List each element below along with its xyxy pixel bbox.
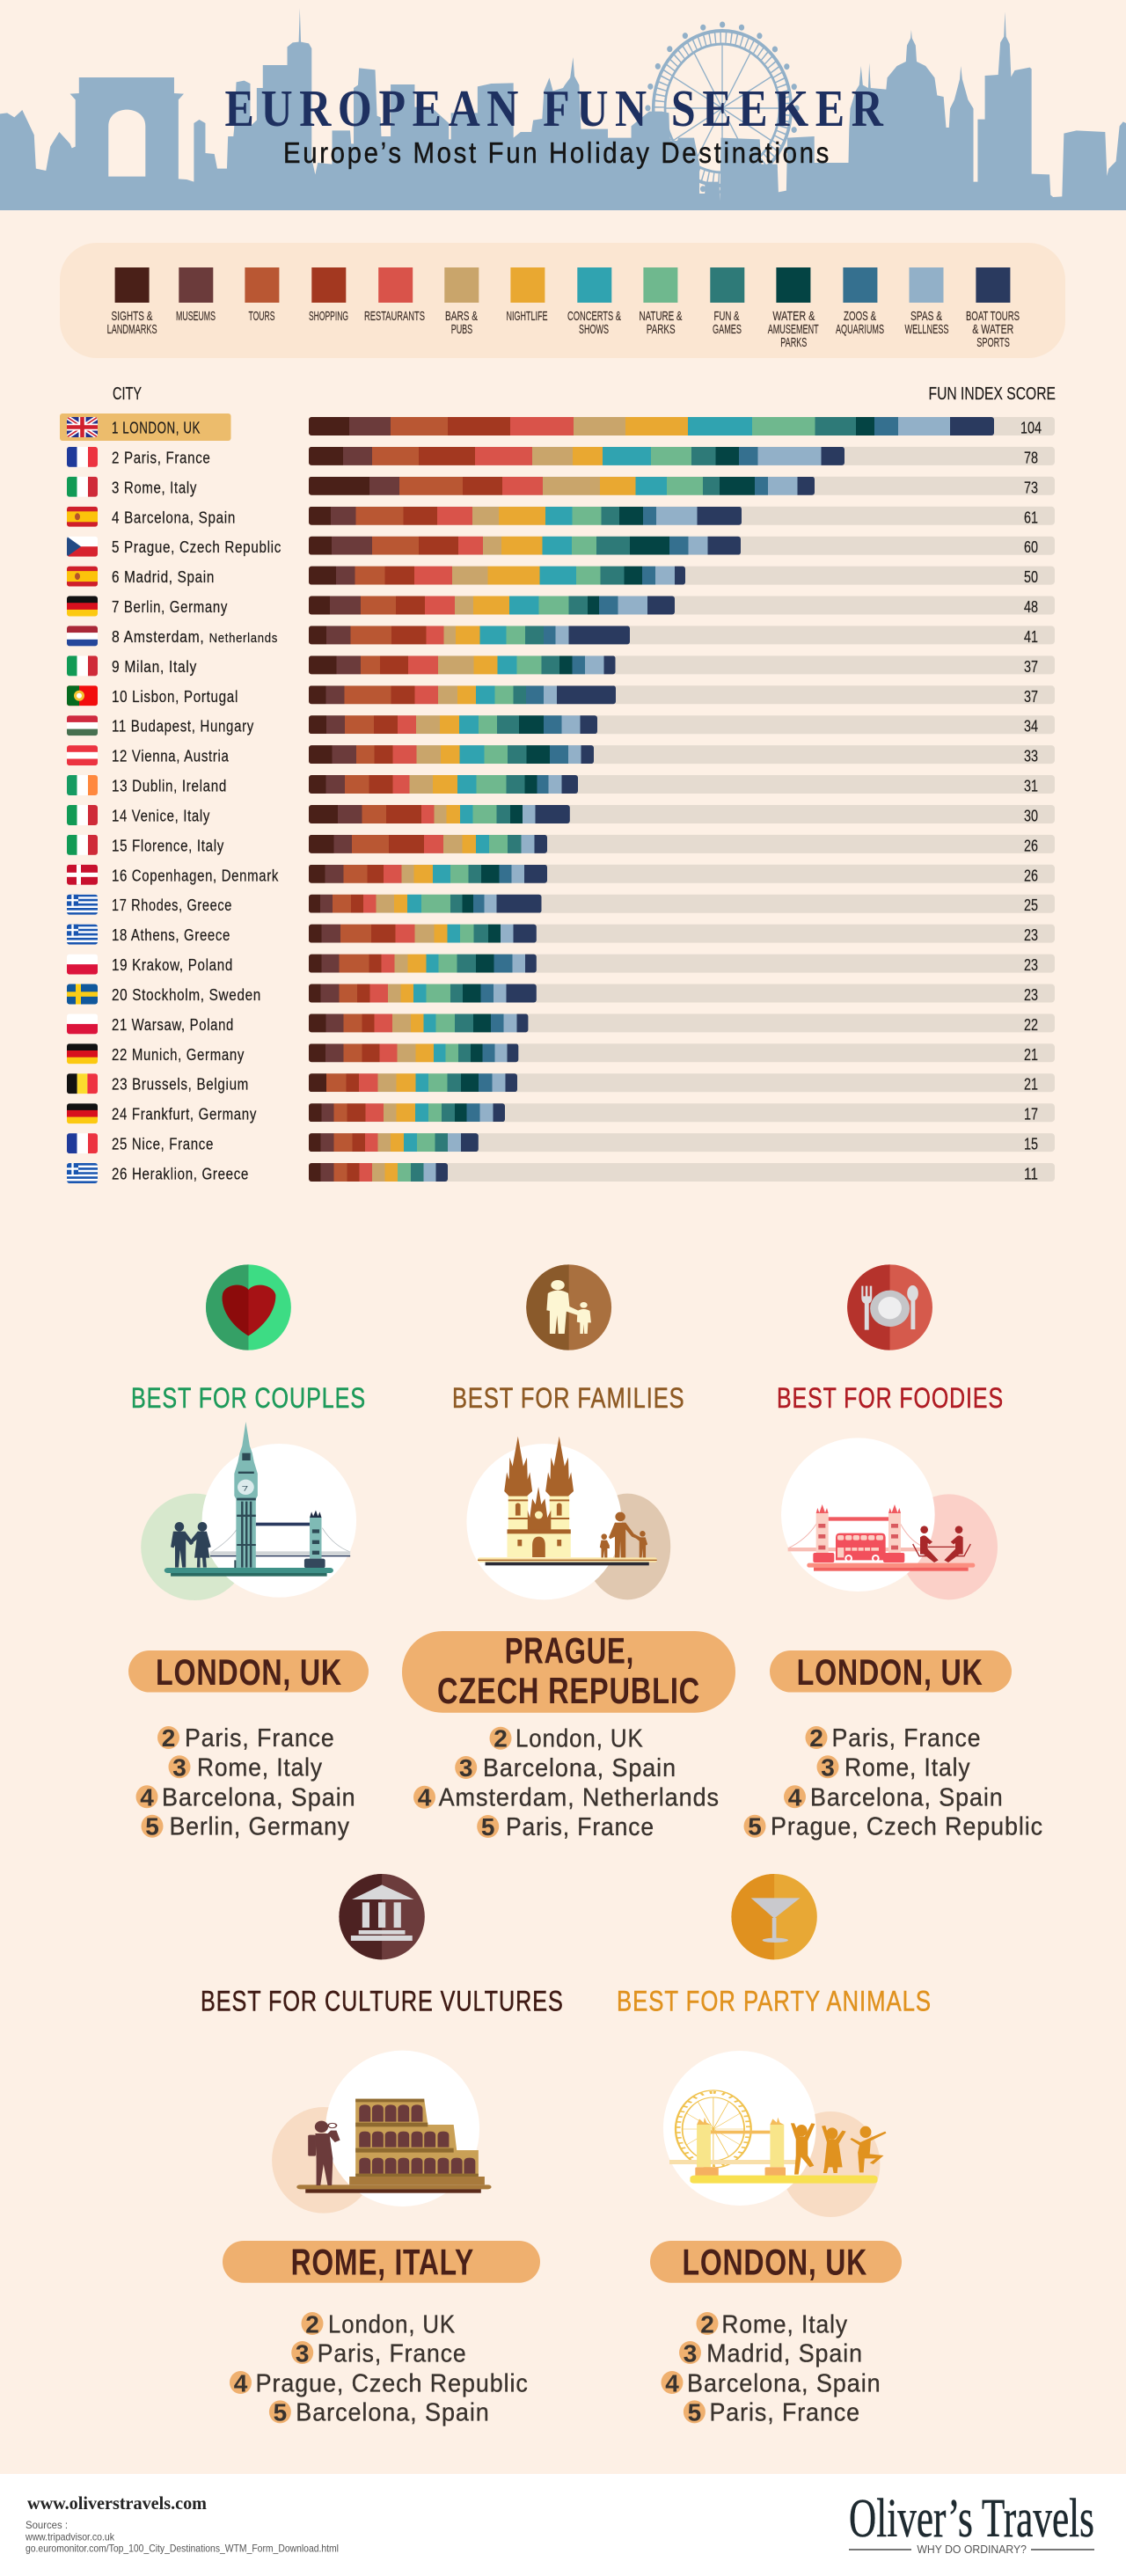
- stacked bar: [309, 426, 994, 428]
- row 10 Lisbon: [67, 685, 1055, 706]
- score: 30: [1024, 808, 1038, 825]
- list: culture runners-up: 4: [234, 2369, 248, 2397]
- row 13 Dublin: [67, 775, 1055, 795]
- list: foodies runners-up: Prague, Czech Republic: [771, 1813, 1043, 1841]
- city label: 4 Barcelona, Spain: [112, 509, 236, 526]
- stacked bar: [309, 1172, 448, 1174]
- icon: cocktail glass for party: [731, 1874, 817, 1959]
- stacked bar: [309, 604, 675, 606]
- legend item: nature and parks: PARKS: [647, 322, 676, 337]
- list: foodies runners-up: 4: [788, 1783, 802, 1811]
- score: 15: [1024, 1136, 1038, 1153]
- list: couples runners-up: Rome, Italy: [197, 1753, 323, 1782]
- illustration: Prague church and family: [466, 1437, 670, 1599]
- list: party runners-up: 3: [684, 2339, 697, 2367]
- heading: best for foodies: BEST FOR FOODIES: [777, 1382, 1004, 1414]
- list: culture runners-up: 3: [296, 2339, 309, 2367]
- flag: Netherlands: [67, 626, 98, 646]
- list: culture runners-up: Prague, Czech Republic: [256, 2369, 529, 2397]
- stacked bar: [309, 1142, 479, 1144]
- legend item: concerts and shows: CONCERTS &: [567, 309, 621, 324]
- list: foodies runners-up: Paris, France: [832, 1724, 981, 1753]
- stacked bar: [309, 873, 547, 875]
- flag: Austria: [67, 745, 98, 765]
- heading: best for party animals: BEST FOR PARTY ANIMALS: [617, 1986, 932, 2017]
- legend item: nightlife: NIGHTLIFE: [507, 309, 547, 324]
- stacked bar: [309, 813, 570, 815]
- list: couples runners-up: Barcelona, Spain: [162, 1783, 356, 1811]
- score: 25: [1024, 896, 1038, 914]
- list: families runners-up: Barcelona, Spain: [483, 1754, 676, 1782]
- list: couples runners-up: Paris, France: [185, 1724, 335, 1753]
- score track: [309, 655, 1055, 674]
- city label: 23 Brussels, Belgium: [112, 1076, 249, 1094]
- legend item: sights and landmarks: [107, 267, 157, 337]
- row 5 Prague: [67, 537, 1055, 557]
- row 4 Barcelona: [67, 507, 1055, 527]
- legend item: bars and pubs: BARS &: [445, 309, 478, 324]
- score: 34: [1024, 718, 1038, 735]
- flag: Hungary: [67, 715, 98, 735]
- list: party runners-up: [662, 2310, 881, 2427]
- score: 26: [1024, 837, 1038, 854]
- legend item: sights and landmarks: SIGHTS &: [111, 309, 153, 324]
- flag: Italy: [67, 655, 98, 676]
- score track: [309, 805, 1055, 823]
- list: party runners-up: 2: [700, 2310, 714, 2338]
- chart: fun index ranking: [60, 413, 1055, 1183]
- legend item: boat tours and water sports: & WATER: [972, 322, 1013, 337]
- header skyline: [0, 8, 1126, 210]
- list: families runners-up: 4: [418, 1784, 432, 1811]
- city label: 25 Nice, France: [112, 1136, 214, 1153]
- city label: 22 Munich, Germany: [112, 1046, 245, 1064]
- list: families runners-up: Amsterdam, Netherlands: [439, 1784, 720, 1812]
- score track: [309, 537, 1055, 555]
- panel: legend: [60, 243, 1065, 358]
- list: culture runners-up: 5: [274, 2399, 287, 2426]
- city label: 19 Krakow, Poland: [112, 956, 233, 974]
- row highlight: [60, 413, 230, 441]
- subtitle: Europe’s Most Fun Holiday Destinations: [283, 136, 831, 169]
- legend item: boat tours and water sports: SPORTS: [976, 335, 1010, 350]
- stacked bar: [309, 783, 578, 785]
- skyline right half: [563, 11, 1126, 210]
- list: party runners-up: Paris, France: [709, 2399, 860, 2427]
- city label: 17 Rhodes, Greece: [112, 896, 232, 914]
- city label: 1 LONDON, UK: [112, 419, 201, 436]
- row 8 Amsterdam: [67, 626, 1055, 646]
- score track: [309, 925, 1055, 943]
- score track: [309, 1103, 1055, 1122]
- pill: top culture winner: ROME, ITALY: [291, 2242, 474, 2283]
- icon: temple for culture: [339, 1874, 425, 1959]
- score: 22: [1024, 1016, 1038, 1034]
- score: 11: [1024, 1165, 1038, 1182]
- score track: [309, 507, 1055, 525]
- legend item: fun and games: [710, 267, 744, 337]
- city label: 18 Athens, Greece: [112, 926, 230, 944]
- score track: [309, 1163, 1055, 1182]
- pill: top party winner: LONDON, UK: [683, 2242, 867, 2283]
- legend item: concerts and shows: SHOWS: [579, 322, 609, 337]
- pill: top foodies winner: LONDON, UK: [797, 1651, 983, 1693]
- legend item: bars and pubs: PUBS: [451, 322, 472, 337]
- stacked bar: [309, 903, 542, 904]
- icon: ferris wheel: [647, 25, 797, 192]
- score track: [309, 895, 1055, 913]
- city label: 8 Amsterdam, Netherlands: [112, 628, 278, 646]
- legend item: water and amusement parks: WATER &: [772, 309, 815, 324]
- list: couples runners-up: Berlin, Germany: [170, 1813, 350, 1841]
- sources: www.tripadvisor.co.uk: [25, 2530, 115, 2543]
- pill: top families winner: PRAGUE,: [505, 1630, 634, 1672]
- score: 26: [1024, 867, 1038, 884]
- list: families runners-up: Paris, France: [506, 1813, 654, 1841]
- stacked bar: [309, 962, 537, 964]
- row 7 Berlin: [67, 596, 1055, 616]
- flag: Ireland: [67, 775, 98, 795]
- pill: top families winner: [402, 1630, 735, 1713]
- score: 33: [1024, 748, 1038, 765]
- row 3 Rome: [67, 477, 1055, 497]
- score: 104: [1020, 419, 1042, 436]
- city label: 12 Vienna, Austria: [112, 748, 230, 765]
- row 6 Madrid: [67, 567, 1055, 587]
- score: 37: [1024, 658, 1038, 676]
- stacked bar: [309, 515, 742, 516]
- flag: Greece: [67, 895, 98, 915]
- city label: 3 Rome, Italy: [112, 479, 197, 496]
- pill: top family couples winner: LONDON, UK: [156, 1651, 342, 1693]
- stacked bar: [309, 694, 616, 696]
- legend item: water and amusement parks: [768, 267, 819, 350]
- city label: 2 Paris, France: [112, 449, 211, 466]
- icon: heart for couples: [206, 1264, 291, 1350]
- legend item: zoos and aquariums: ZOOS &: [844, 309, 876, 324]
- score track: [309, 1133, 1055, 1152]
- stacked bar: [309, 843, 547, 845]
- heading: best for couples: BEST FOR COUPLES: [131, 1382, 366, 1414]
- legend item: boat tours and water sports: [966, 267, 1020, 350]
- legend item: restaurants: [364, 267, 425, 324]
- list: families runners-up: 2: [494, 1725, 508, 1753]
- list: foodies runners-up: 3: [821, 1753, 835, 1781]
- legend item: nature and parks: [639, 267, 683, 337]
- website link: www.oliverstravels.com: [27, 2492, 207, 2514]
- stacked bar: [309, 992, 537, 994]
- list: party runners-up: 4: [665, 2369, 679, 2397]
- logo: Oliver's Travels: WHY DO ORDINARY?: [917, 2543, 1027, 2556]
- legend item: water and amusement parks: AMUSEMENT: [768, 322, 819, 337]
- flag: Germany: [67, 1103, 98, 1123]
- score: 21: [1024, 1046, 1038, 1064]
- list: foodies runners-up: [744, 1724, 1043, 1841]
- flag: France: [67, 447, 98, 467]
- legend item: museums: MUSEUMS: [176, 309, 216, 324]
- row 22 Munich: [67, 1043, 1055, 1064]
- score track: [309, 715, 1055, 734]
- score: 17: [1024, 1106, 1038, 1123]
- score track: [309, 417, 1055, 435]
- stacked bar: [309, 634, 630, 636]
- legend item: bars and pubs: [444, 267, 479, 337]
- legend item: museums: [176, 267, 216, 324]
- score: 23: [1024, 926, 1038, 944]
- illustration: London landmarks and couple: [141, 1422, 356, 1600]
- score: 41: [1024, 628, 1038, 646]
- legend item: nightlife: [507, 267, 547, 324]
- flag: Germany: [67, 1043, 98, 1064]
- score track: [309, 477, 1055, 495]
- score track: [309, 626, 1055, 644]
- sources: [25, 2519, 339, 2555]
- score track: [309, 685, 1055, 704]
- city label: 26 Heraklion, Greece: [112, 1165, 249, 1182]
- list: culture runners-up: Paris, France: [318, 2339, 467, 2367]
- flag: Germany: [67, 596, 98, 616]
- stacked bar: [309, 664, 616, 666]
- list: couples runners-up: 4: [140, 1783, 154, 1811]
- list: foodies runners-up: 2: [809, 1724, 823, 1752]
- list: families runners-up: 3: [459, 1754, 472, 1782]
- legend item: tours: [245, 267, 279, 324]
- legend item: restaurants: RESTAURANTS: [364, 309, 425, 324]
- city label: 20 Stockholm, Sweden: [112, 986, 261, 1004]
- legend item: zoos and aquariums: AQUARIUMS: [836, 322, 884, 337]
- score track: [309, 745, 1055, 764]
- flag: Denmark: [67, 865, 98, 885]
- row 21 Warsaw: [67, 1014, 1055, 1034]
- skyline left half: [0, 8, 563, 210]
- score: 50: [1024, 568, 1038, 586]
- column heading: fun index score: FUN INDEX SCORE: [929, 384, 1056, 404]
- list: couples runners-up: 3: [172, 1753, 186, 1781]
- flag: Greece: [67, 925, 98, 945]
- row 26 Heraklion: [67, 1163, 1055, 1183]
- score: 48: [1024, 598, 1038, 616]
- legend item: nature and parks: NATURE &: [639, 309, 683, 324]
- row 11 Budapest: [67, 715, 1055, 735]
- flag: Sweden: [67, 984, 98, 1005]
- score track: [309, 1043, 1055, 1062]
- row 14 Venice: [67, 805, 1055, 825]
- panel: footer: [0, 2474, 1126, 2576]
- city label: 15 Florence, Italy: [112, 837, 224, 854]
- flag: Italy: [67, 805, 98, 825]
- stacked bar: [309, 754, 594, 756]
- legend item: spas and wellness: SPAS &: [910, 309, 942, 324]
- list: foodies runners-up: 5: [748, 1813, 762, 1841]
- city label: 24 Frankfurt, Germany: [112, 1106, 257, 1123]
- score track: [309, 1014, 1055, 1032]
- row 16 Copenhagen: [67, 865, 1055, 885]
- score: 73: [1024, 479, 1038, 496]
- list: foodies runners-up: Rome, Italy: [844, 1753, 971, 1782]
- list: culture runners-up: [230, 2310, 529, 2427]
- flag: Poland: [67, 1014, 98, 1034]
- row 9 Milan: [67, 655, 1055, 676]
- score: 23: [1024, 986, 1038, 1004]
- flag: Czech Republic: [67, 537, 98, 557]
- stacked bar: [309, 545, 741, 546]
- score track: [309, 955, 1055, 973]
- illustration: London bridge, bus and diners: [781, 1438, 998, 1599]
- score: 61: [1024, 509, 1038, 526]
- list: families runners-up: [413, 1725, 720, 1841]
- flag: Italy: [67, 835, 98, 855]
- legend item: concerts and shows: [567, 267, 621, 337]
- title: EUROPEAN FUN SEEKER: [225, 79, 890, 137]
- city label: 9 Milan, Italy: [112, 658, 197, 676]
- score track: [309, 984, 1055, 1003]
- list: couples runners-up: 5: [145, 1813, 159, 1841]
- flag: Poland: [67, 955, 98, 975]
- list: culture runners-up: Barcelona, Spain: [296, 2399, 490, 2427]
- stacked bar: [309, 485, 815, 487]
- city label: 7 Berlin, Germany: [112, 598, 228, 616]
- score: 37: [1024, 688, 1038, 706]
- city label: 16 Copenhagen, Denmark: [112, 867, 279, 884]
- icon: plate and cutlery for foodies: [847, 1264, 932, 1350]
- column heading: city: CITY: [113, 384, 142, 404]
- score: 23: [1024, 956, 1038, 974]
- legend item: fun and games: GAMES: [713, 322, 742, 337]
- flag: Italy: [67, 477, 98, 497]
- score track: [309, 596, 1055, 614]
- stacked bar: [309, 1112, 505, 1114]
- flag: Spain: [67, 567, 98, 587]
- stacked bar: [309, 1052, 518, 1054]
- row 23 Brussels: [67, 1073, 1055, 1094]
- city label: 13 Dublin, Ireland: [112, 778, 227, 795]
- heading: best for families: BEST FOR FAMILIES: [452, 1382, 685, 1414]
- city label: 14 Venice, Italy: [112, 808, 210, 825]
- row 2 Paris: [67, 447, 1055, 467]
- illustration: London wheel and party people: [663, 2051, 886, 2217]
- row 12 Vienna: [67, 745, 1055, 765]
- score track: [309, 775, 1055, 794]
- row 25 Nice: [67, 1133, 1055, 1153]
- row 20 Stockholm: [67, 984, 1055, 1005]
- list: families runners-up: London, UK: [515, 1725, 644, 1753]
- list: party runners-up: Barcelona, Spain: [687, 2369, 881, 2397]
- stacked bar: [309, 574, 685, 576]
- score: 60: [1024, 538, 1038, 556]
- list: party runners-up: 5: [688, 2399, 701, 2426]
- stacked bar: [309, 1082, 517, 1084]
- score track: [309, 1073, 1055, 1092]
- city label: 21 Warsaw, Poland: [112, 1016, 234, 1034]
- row 18 Athens: [67, 925, 1055, 945]
- list: families runners-up: 5: [481, 1813, 494, 1841]
- city label: 10 Lisbon, Portugal: [112, 688, 238, 706]
- sources: go.euromonitor.com/Top_100_City_Destinations_WTM_Form_Download.html: [26, 2543, 339, 2555]
- sources: Sources :: [26, 2519, 68, 2531]
- flag: Portugal: [67, 685, 98, 706]
- row 15 Florence: [67, 835, 1055, 855]
- stacked bar: [309, 724, 597, 726]
- legend item: shopping: [309, 267, 348, 324]
- flag: Spain: [67, 507, 98, 527]
- score: 31: [1024, 778, 1038, 795]
- row 17 Rhodes: [67, 895, 1055, 915]
- list: party runners-up: Rome, Italy: [721, 2310, 848, 2338]
- row 24 Frankfurt: [67, 1103, 1055, 1123]
- flag: Greece: [67, 1163, 98, 1183]
- flag: France: [67, 1133, 98, 1153]
- legend item: tours: TOURS: [248, 309, 274, 324]
- legend item: shopping: SHOPPING: [309, 309, 348, 324]
- list: couples runners-up: 2: [162, 1724, 175, 1752]
- list: culture runners-up: London, UK: [328, 2310, 456, 2338]
- city label: 6 Madrid, Spain: [112, 568, 215, 586]
- score track: [309, 865, 1055, 883]
- heading: best for culture vultures: BEST FOR CULTURE VULTURES: [201, 1986, 564, 2017]
- legend item: fun and games: FUN &: [714, 309, 739, 324]
- score track: [309, 835, 1055, 853]
- city label: 11 Budapest, Hungary: [112, 718, 254, 735]
- score: 78: [1024, 449, 1038, 466]
- legend item: spas and wellness: [904, 267, 948, 337]
- row 1 London: [60, 413, 1055, 441]
- legend item: sights and landmarks: LANDMARKS: [107, 322, 157, 337]
- legend item: boat tours and water sports: BOAT TOURS: [966, 309, 1020, 324]
- illustration: Colosseum and photographer: [272, 2051, 492, 2214]
- legend item: spas and wellness: WELLNESS: [904, 322, 948, 337]
- score track: [309, 567, 1055, 585]
- pill: top families winner: CZECH REPUBLIC: [437, 1670, 700, 1711]
- flag: Belgium: [67, 1073, 98, 1094]
- city label: 5 Prague, Czech Republic: [112, 538, 282, 556]
- list: culture runners-up: 2: [305, 2310, 319, 2338]
- stacked bar: [309, 1022, 528, 1024]
- score track: [309, 447, 1055, 465]
- list: foodies runners-up: Barcelona, Spain: [810, 1783, 1004, 1811]
- legend item: zoos and aquariums: [836, 267, 884, 337]
- list: party runners-up: Madrid, Spain: [706, 2339, 863, 2367]
- legend item: water and amusement parks: PARKS: [780, 335, 807, 350]
- score: 21: [1024, 1076, 1038, 1094]
- stacked bar: [309, 933, 537, 934]
- icon: parent and child for families: [526, 1264, 611, 1350]
- list: couples runners-up: [135, 1724, 356, 1841]
- stacked bar: [309, 455, 844, 457]
- flag: UK: [67, 417, 98, 437]
- row 19 Krakow: [67, 955, 1055, 975]
